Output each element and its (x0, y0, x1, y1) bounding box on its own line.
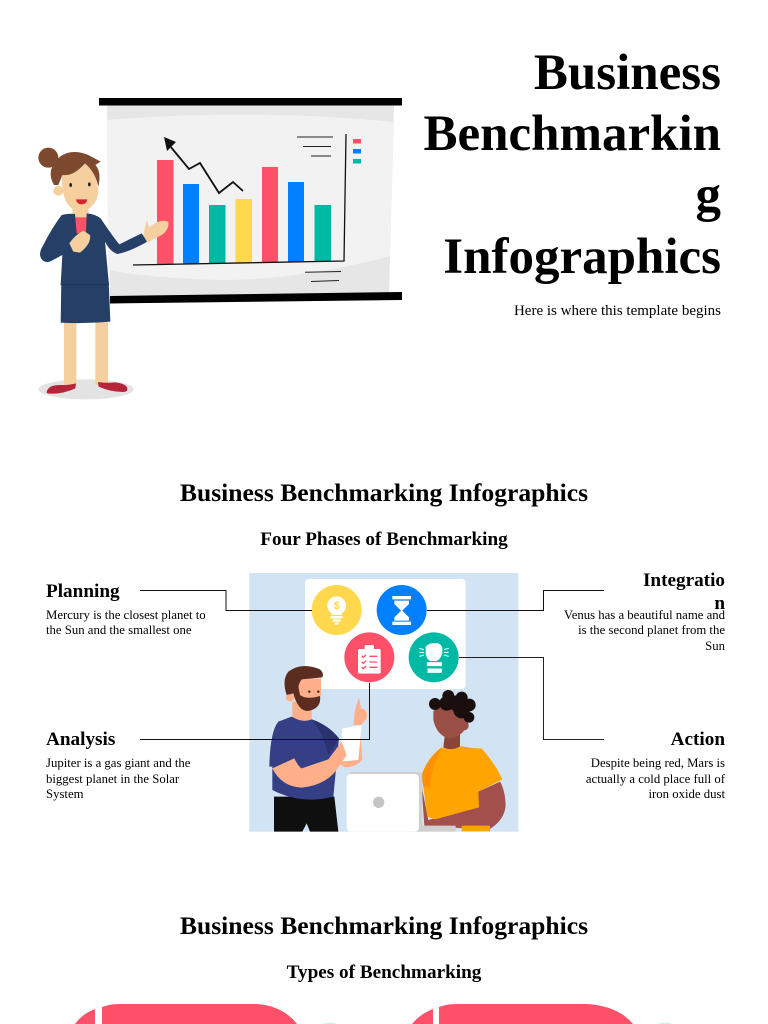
label: planning: Planning (46, 581, 120, 602)
label: analysis: Analysis (46, 729, 115, 750)
illustration: presenter with chart screen (38, 98, 402, 400)
text: integration description: is the second planet from the (578, 623, 725, 637)
section subheading: four phases: Four Phases of Benchmarking (260, 529, 508, 550)
man with tablet (269, 666, 367, 832)
text: action description: iron oxide dust (648, 787, 725, 801)
section heading: types: Business Benchmarking Infographics (180, 911, 588, 940)
title: Business (534, 44, 721, 100)
text: planning description: the Sun and the smallest one (46, 623, 192, 637)
text: analysis description: biggest planet in the Solar (46, 772, 179, 786)
text: integration description: Sun (705, 639, 725, 653)
label: integration (643, 570, 725, 614)
label: integration: n (714, 592, 725, 614)
illustration background panel (249, 573, 518, 832)
icon: light bulb (312, 585, 362, 635)
section subheading: types: Types of Benchmarking (287, 962, 481, 983)
pale teal circles (314, 1022, 346, 1024)
text: integration description: Venus has a beautiful name and (564, 608, 725, 622)
icon: light bulb: $ (334, 600, 340, 612)
text: action description: actually a cold place full of (586, 772, 725, 786)
title (423, 44, 721, 285)
woman at laptop (347, 690, 506, 832)
text: analysis description (46, 756, 190, 801)
text: action description (586, 756, 725, 801)
connector: analysis (140, 683, 370, 740)
text: analysis description: System (46, 787, 84, 801)
presenter figure (38, 148, 168, 399)
text: action description: Despite being red, Mars is (591, 756, 725, 770)
text: planning description: Mercury is the closest planet to (46, 608, 206, 622)
text: planning description (46, 608, 206, 637)
icon: clipboard (344, 632, 394, 682)
text: analysis description: Jupiter is a gas giant and the (46, 756, 190, 770)
connector: action (459, 658, 604, 740)
title: g (696, 167, 721, 223)
title: Benchmarkin (423, 106, 721, 162)
title: Infographics (443, 229, 721, 285)
connector: planning (140, 590, 312, 610)
icon: hourglass (377, 585, 427, 635)
pink card left (75, 1004, 297, 1024)
text: integration description (564, 608, 725, 653)
section heading: four phases: Business Benchmarking Infographics (180, 478, 588, 507)
label: action: Action (671, 729, 725, 750)
pink card right (412, 1004, 633, 1024)
icon board (305, 579, 466, 689)
label: integration: Integratio (643, 570, 725, 591)
connector: integration (427, 590, 604, 610)
bar chart (133, 134, 361, 282)
projection screen (99, 98, 402, 304)
subtitle: Here is where this template begins (514, 303, 721, 319)
icon: raised fist (409, 632, 459, 682)
